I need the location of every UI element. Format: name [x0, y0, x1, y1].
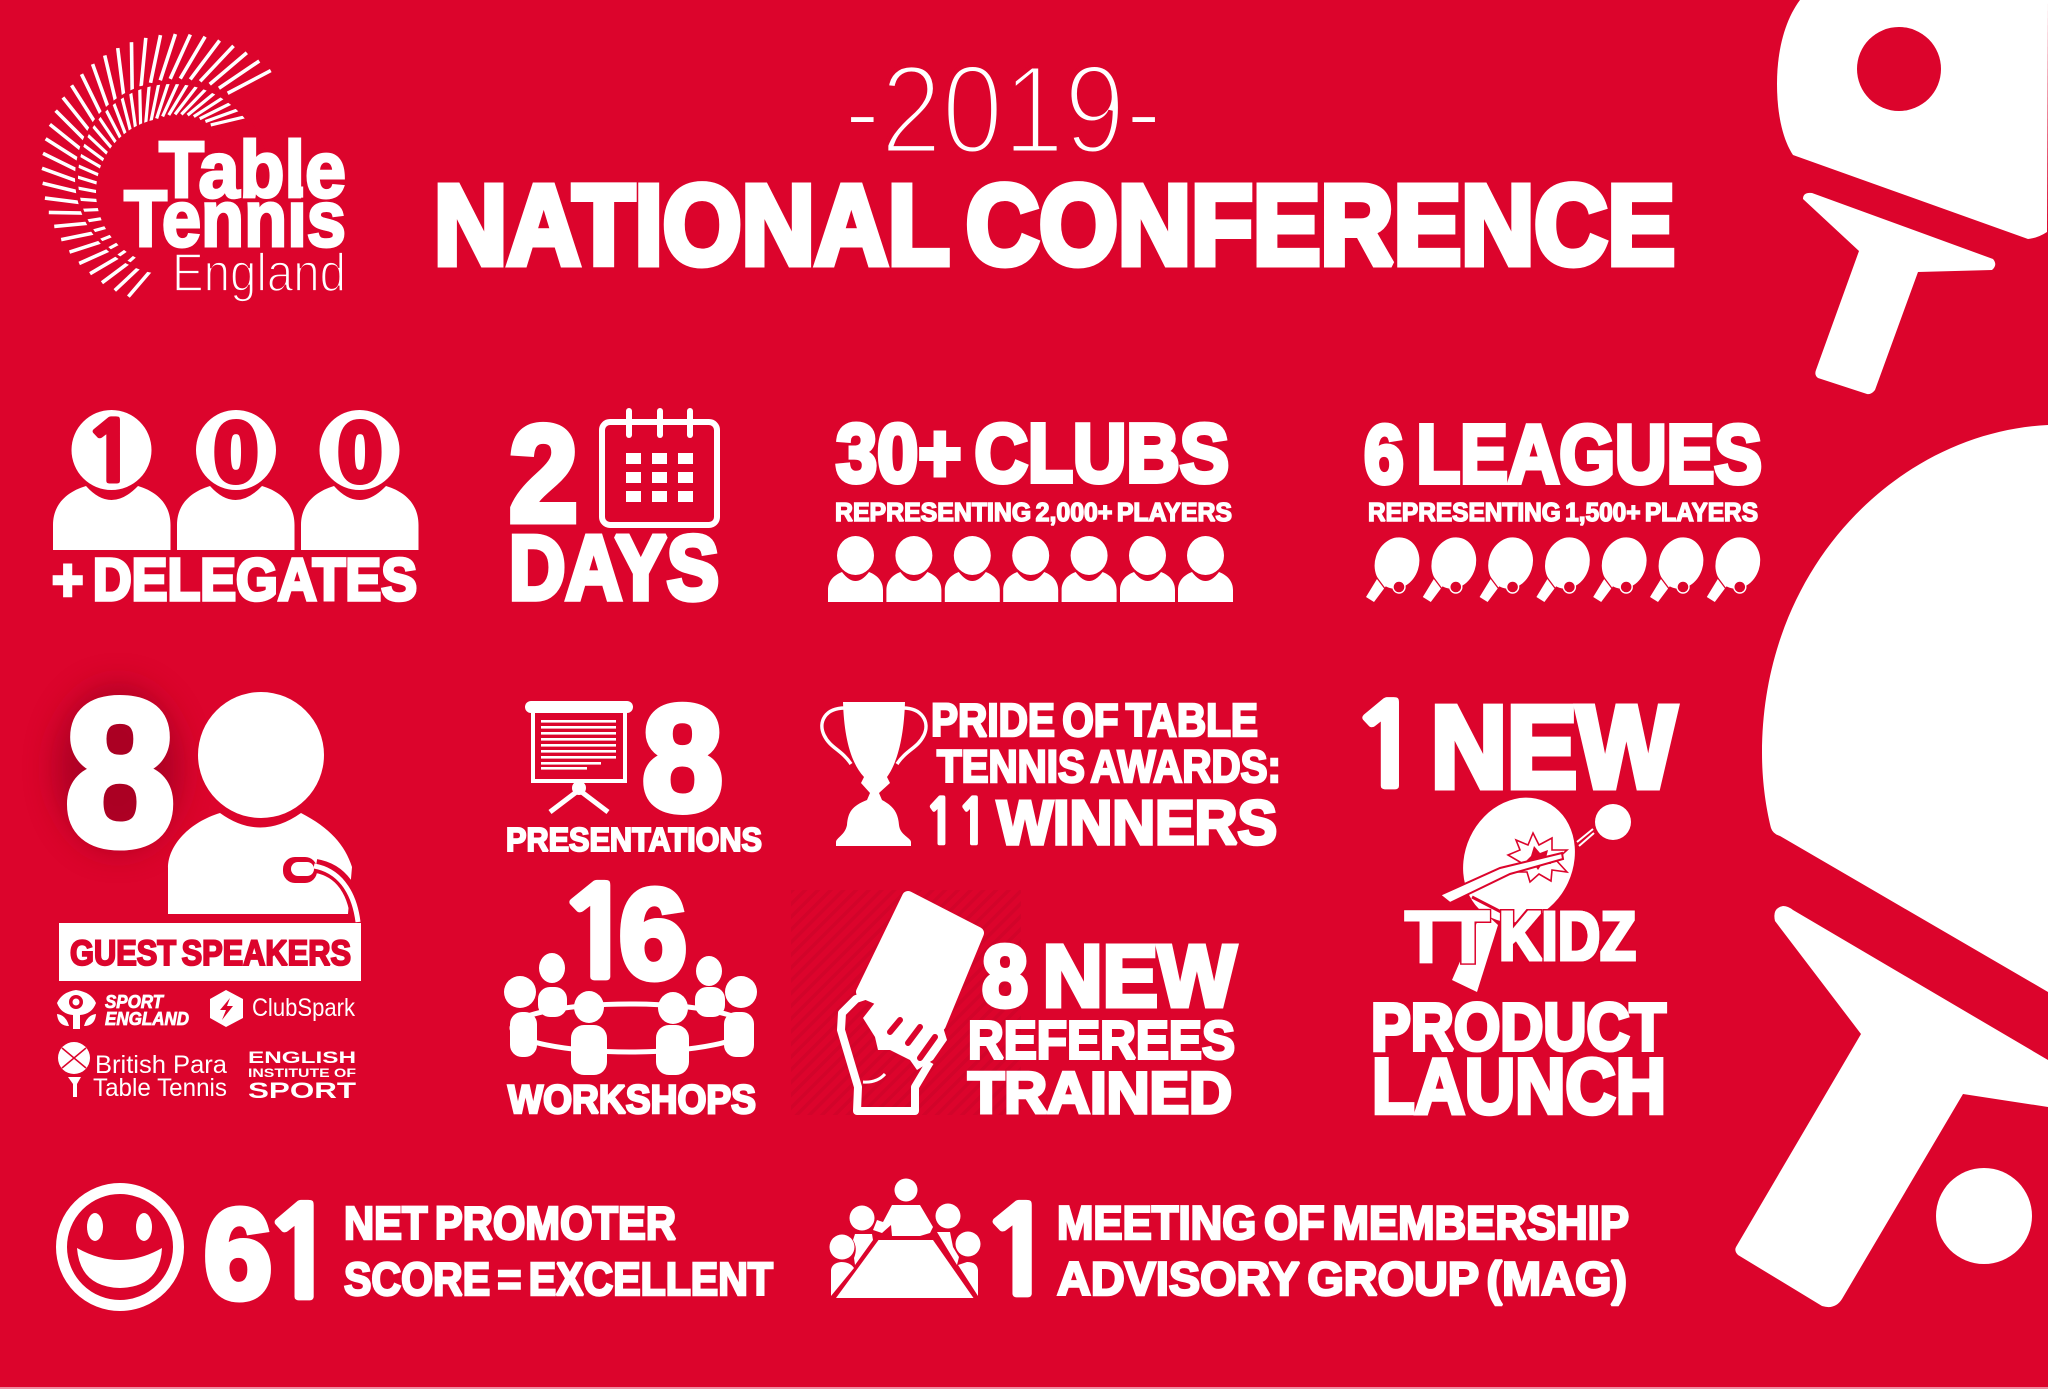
number 8: 8	[642, 674, 723, 842]
leagues subheading: REPRESENTING 1,500+ PLAYERS	[1368, 499, 1758, 527]
logo: British Para Table Tennis	[58, 1042, 227, 1102]
mag text line 2: ADVISORY GROUP (MAG)	[1057, 1252, 1627, 1305]
logo: English Institute of Sport: INSTITUTE OF	[248, 1066, 356, 1080]
delegate 1	[53, 410, 170, 550]
stat: 2 days	[509, 398, 719, 619]
clubs subheading: REPRESENTING 2,000+ PLAYERS	[835, 499, 1232, 527]
referees text line 1: 8 NEW	[982, 928, 1237, 1025]
product label: PRODUCT	[1371, 990, 1666, 1065]
leagues heading: 6 LEAGUES	[1364, 408, 1762, 500]
logo: English Institute of Sport: ENGLISH	[248, 1048, 356, 1067]
delegate 2: 0	[214, 405, 258, 499]
icon: meeting table	[830, 1178, 980, 1298]
paddle hole	[1857, 27, 1941, 111]
number 16	[553, 863, 687, 1005]
icon: trophy	[822, 702, 926, 846]
icon: smiley face	[62, 1188, 178, 1306]
presentations label: PRESENTATIONS	[506, 822, 762, 859]
logo: English Institute of Sport	[248, 1048, 357, 1103]
icon: calendar	[602, 408, 717, 525]
nps text line 1: NET PROMOTER	[344, 1197, 676, 1249]
paddle head	[1762, 425, 2048, 992]
delegate 1: 1	[82, 411, 140, 495]
nps text line 2: SCORE = EXCELLENT	[344, 1253, 773, 1305]
top right paddle	[1777, 0, 2048, 394]
stat: 8 new referees	[791, 890, 1237, 1126]
shadow behind 8	[56, 686, 180, 850]
number 8: 8	[65, 657, 175, 888]
stat: 30+ clubs	[828, 406, 1233, 602]
heading: 1 new	[1348, 682, 1676, 812]
stat: pride of table tennis awards	[822, 694, 1281, 858]
awards text line 3: 11	[924, 793, 989, 854]
number 1: 1	[977, 1193, 1061, 1314]
workshops label: WORKSHOPS	[508, 1078, 756, 1122]
number 61	[204, 1183, 343, 1325]
icon: TT Kidz logo: KIDZ	[1499, 897, 1636, 975]
stat: 16 workshops	[504, 863, 757, 1122]
paddle handle	[1803, 193, 1995, 394]
number 61: 1	[259, 1191, 343, 1317]
logo: Sport England: ENGLAND	[105, 1009, 189, 1029]
logo wordmark	[124, 125, 346, 303]
stat: 8 presentations	[506, 674, 762, 859]
delegate 3: 0	[338, 405, 382, 499]
icon: TT Kidz logo	[1405, 779, 1636, 992]
delegate 3	[301, 405, 418, 550]
heading: 1 new: 1	[1348, 690, 1426, 805]
days label: DAYS	[509, 518, 719, 619]
logo: ClubSpark: ClubSpark	[252, 994, 355, 1022]
icon: hand holding card	[841, 897, 978, 1111]
icon: projector screen	[525, 701, 633, 812]
number 16: 6	[619, 863, 687, 1005]
logo wordmark: Table	[159, 125, 346, 214]
logo: British Para Table Tennis: British Para	[95, 1051, 227, 1079]
logo wordmark: England	[172, 243, 346, 303]
icon row: paddles	[1366, 531, 1767, 602]
logo: Sport England: SPORT	[105, 992, 165, 1012]
awards text line 3: WINNERS	[997, 789, 1277, 858]
title year: -2019-	[844, 39, 1162, 180]
guest speakers banner	[59, 923, 361, 981]
stat: 6 leagues	[1364, 408, 1767, 602]
stat: 8 guest speakers	[56, 657, 361, 1103]
ping pong ball	[1936, 1168, 2032, 1264]
delegate 2	[177, 405, 294, 550]
logo: Table Tennis England	[41, 33, 346, 303]
paddle head	[1777, 0, 2048, 239]
icon: speaker at microphone	[168, 692, 358, 925]
logo: English Institute of Sport: SPORT	[248, 1078, 357, 1103]
icon: TT Kidz logo: TT	[1405, 898, 1489, 978]
guest speakers banner: GUEST SPEAKERS	[70, 934, 351, 973]
stat: net promoter score	[62, 1183, 773, 1325]
referees text line 3: TRAINED	[968, 1061, 1232, 1126]
paddle handle	[1735, 906, 2048, 1307]
referees text line 2: REFEREES	[968, 1010, 1235, 1070]
logo rays	[41, 33, 271, 302]
stat: 1 new product launch	[1348, 682, 1676, 1130]
icon: workshop circle of people	[504, 953, 757, 1075]
logo: Sport England	[57, 990, 189, 1029]
striped backdrop	[791, 890, 1021, 1115]
number 16: 1	[553, 871, 641, 997]
heading: 1 new: NEW	[1431, 682, 1676, 812]
large right paddle	[1735, 425, 2048, 1307]
title: NATIONAL CONFERENCE	[434, 162, 1675, 288]
logo wordmark: Tennis	[124, 174, 346, 263]
launch label: LAUNCH	[1372, 1042, 1666, 1130]
icon row: people	[828, 536, 1233, 602]
number 2: 2	[509, 398, 578, 551]
number 61: 6	[204, 1183, 272, 1325]
logo: ClubSpark	[210, 990, 355, 1027]
stat: membership advisory group	[830, 1178, 1629, 1314]
mag text line 1: MEETING OF MEMBERSHIP	[1057, 1196, 1629, 1249]
clubs heading: 30+ CLUBS	[836, 406, 1229, 500]
logo: British Para Table Tennis: Table Tennis	[93, 1074, 227, 1102]
awards text line 2: TENNIS AWARDS:	[937, 741, 1281, 792]
awards text line 1: PRIDE OF TABLE	[931, 694, 1258, 746]
stat: 100+ delegates	[52, 405, 418, 613]
delegates label: + DELEGATES	[52, 547, 417, 613]
